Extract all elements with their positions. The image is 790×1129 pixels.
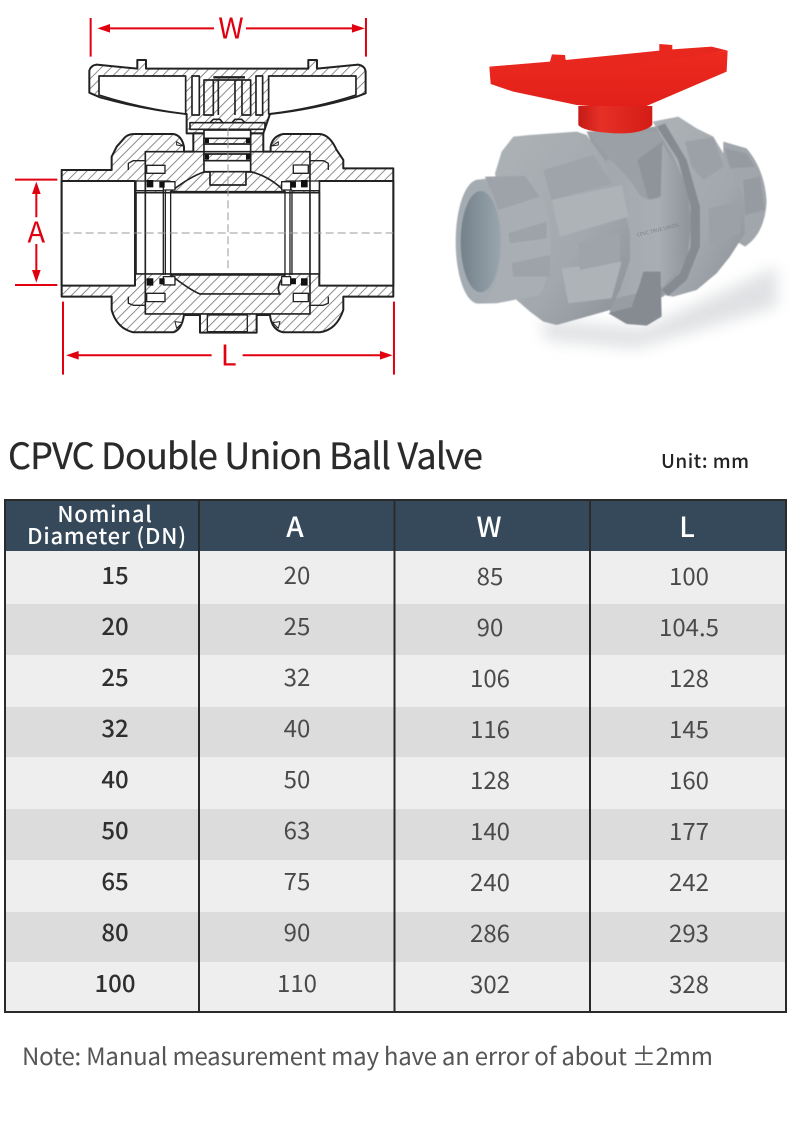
W column: 90 (477, 608, 503, 643)
A column: 50 (284, 760, 310, 795)
unit label: Unit: mm (661, 447, 749, 474)
W column: 85 (477, 557, 503, 592)
table rows background (4, 551, 787, 1012)
W column: 240 (470, 863, 510, 898)
table header: W (476, 506, 502, 546)
A column: 25 (284, 607, 310, 642)
DN column: 100 (94, 964, 136, 999)
valve body section (62, 130, 393, 333)
L column: 242 (669, 863, 709, 898)
L column: 293 (669, 914, 709, 949)
DN column (94, 556, 136, 999)
L column: 104.5 (659, 608, 719, 643)
A column: 32 (284, 658, 310, 693)
valve handle stem (578, 106, 652, 133)
dimension W: W (218, 5, 244, 47)
right nut ring (657, 123, 700, 296)
table header (4, 497, 787, 551)
A column: 110 (277, 964, 317, 999)
left socket tube (478, 173, 551, 304)
L column: 145 (669, 710, 709, 745)
dimensions table (4, 497, 787, 1012)
table header: Diameter (DN) (27, 519, 187, 551)
dimension W: A (28, 210, 46, 252)
L column: 177 (669, 812, 709, 847)
A column: 90 (284, 913, 310, 948)
valve handle top (489, 44, 728, 77)
DN column: 50 (101, 811, 129, 846)
DN column: 20 (101, 607, 129, 642)
W column: 286 (470, 914, 510, 949)
product photo: CPVC ball valve (456, 44, 777, 348)
W column: 128 (470, 761, 510, 796)
stem neck (587, 132, 662, 200)
body marking: CPVC TRUE UNION (636, 221, 680, 239)
DN column: 65 (101, 862, 129, 897)
socket end face (456, 180, 501, 304)
dimension W: L (221, 333, 237, 375)
valve gray parts (456, 117, 767, 326)
DN column: 80 (101, 913, 129, 948)
A column (277, 556, 317, 999)
floor shadow (540, 267, 777, 348)
base silhouette (587, 126, 695, 313)
A column: 75 (284, 862, 310, 897)
W column: 140 (470, 812, 510, 847)
DN column: 25 (101, 658, 129, 693)
W column: 116 (470, 710, 510, 745)
DN column: 15 (101, 556, 129, 591)
L column: 160 (669, 761, 709, 796)
socket bore (461, 191, 501, 292)
DN column: 40 (101, 760, 129, 795)
center body (607, 145, 692, 300)
W column: 106 (470, 659, 510, 694)
right union nut (653, 117, 745, 297)
center lines (62, 128, 393, 272)
title: CPVC Double Union Ball Valve (8, 428, 483, 480)
L column: 128 (669, 659, 709, 694)
handle section (89, 60, 366, 133)
valve handle side (489, 51, 728, 109)
table header: L (679, 506, 695, 546)
dimension W (15, 5, 394, 375)
L column: 100 (669, 557, 709, 592)
right end socket (723, 142, 767, 247)
table header: A (286, 506, 304, 546)
table header: Nominal (57, 497, 153, 529)
W column: 302 (470, 965, 510, 1000)
footnote: Note: Manual measurement may have an error of about ±2mm (22, 1037, 713, 1072)
L column: 328 (669, 965, 709, 1000)
W column (470, 557, 510, 1000)
A column: 20 (284, 556, 310, 591)
L column (659, 557, 719, 1000)
A column: 40 (284, 709, 310, 744)
cross-section diagram with dimensions (15, 5, 394, 375)
bottom foot (608, 272, 662, 326)
left union nut (495, 132, 630, 325)
A column: 63 (284, 811, 310, 846)
DN column: 32 (101, 709, 129, 744)
